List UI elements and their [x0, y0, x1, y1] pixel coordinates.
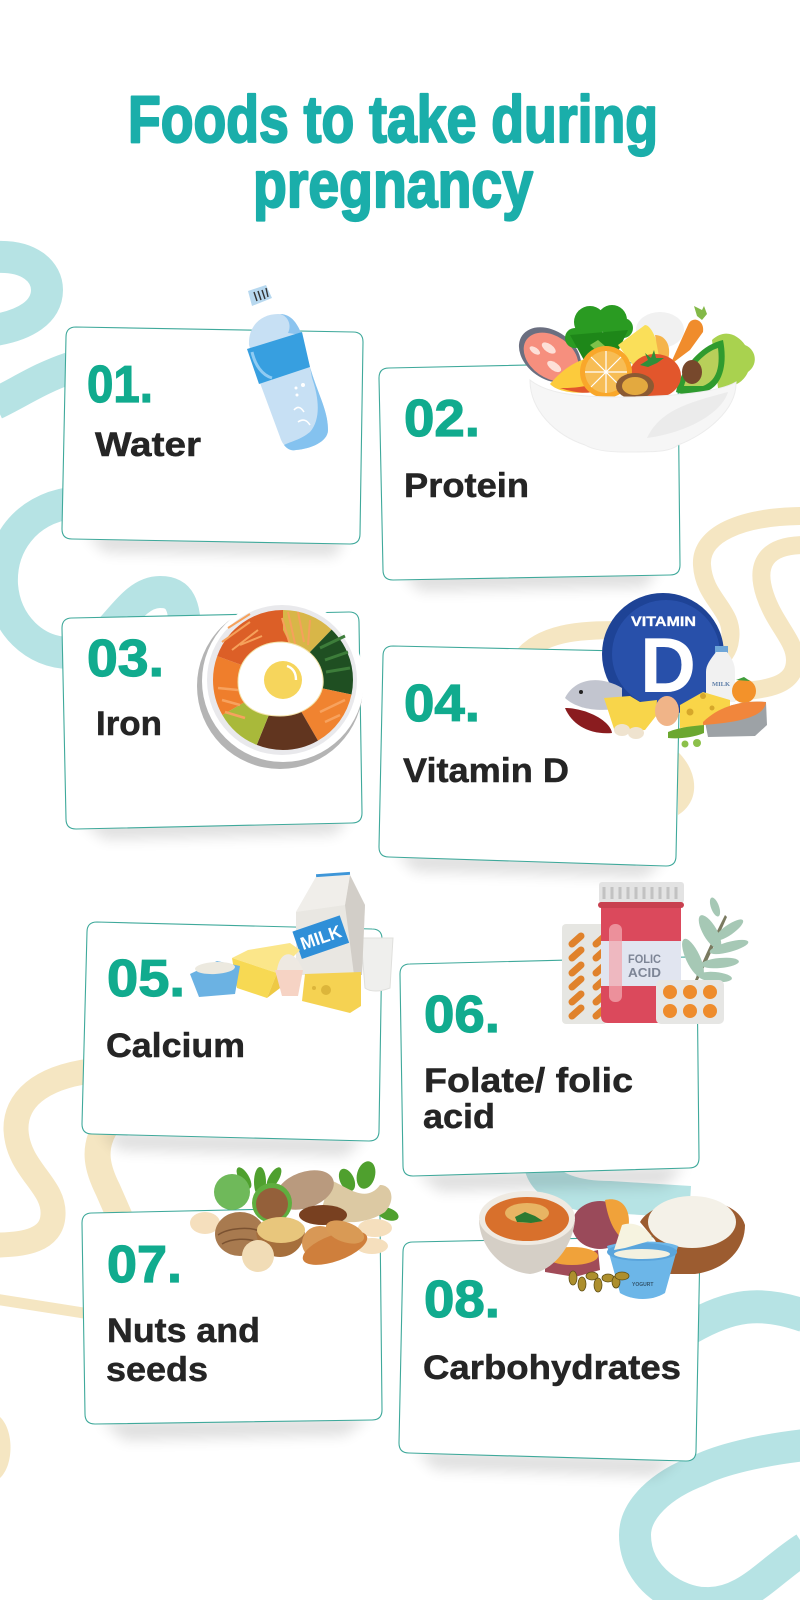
ingredient wedges — [233, 630, 333, 730]
salmon — [508, 316, 592, 394]
carrot — [670, 320, 703, 365]
peas — [668, 725, 704, 738]
right blister — [656, 980, 724, 1024]
glass — [361, 938, 393, 991]
panel: 02 protein: Protein — [404, 467, 529, 505]
salmon steak — [705, 702, 767, 737]
panel: 03 iron: Iron — [96, 705, 162, 743]
bowl — [530, 380, 736, 452]
panel: 04 vitamin d — [379, 646, 680, 877]
panel: 08 carbohydrates: 08. — [424, 1271, 500, 1329]
cheese wedge — [302, 972, 361, 1013]
pecan — [271, 1163, 339, 1217]
panel: 07 nuts — [82, 1207, 382, 1440]
icon: folic acid bottle — [562, 882, 750, 1024]
orange — [732, 679, 756, 703]
panel: 07 nuts: Nuts and — [107, 1312, 260, 1350]
yogurt cup — [607, 1242, 678, 1299]
panel: 01 water — [62, 327, 363, 556]
panel: 07 nuts: 07. — [107, 1236, 182, 1294]
icon: food bowl — [508, 305, 755, 452]
ice cream — [275, 970, 303, 996]
milk bottle — [715, 646, 728, 653]
panel: 06 folate — [400, 957, 699, 1191]
icon: nuts group — [190, 1159, 400, 1272]
icon: dairy group — [190, 872, 393, 1013]
bottle — [599, 882, 684, 903]
panel: 08 carbohydrates: Carbohydrates — [423, 1349, 681, 1387]
butter — [232, 943, 300, 973]
mushrooms — [614, 724, 630, 736]
leaves — [678, 896, 750, 983]
icon: vitamin D group: MILK — [712, 681, 730, 688]
tomato — [629, 354, 681, 398]
icon: vitamin D group: D — [640, 621, 696, 709]
panel: 04 vitamin d: 04. — [404, 675, 480, 733]
walnut — [616, 373, 654, 399]
panel: 06 folate: 06. — [424, 986, 500, 1044]
rice bowl — [640, 1200, 745, 1274]
title: pregnancy — [253, 147, 533, 221]
apple — [550, 358, 592, 393]
sweet potato — [572, 1201, 628, 1249]
icon: vitamin D group — [565, 593, 767, 748]
panel: 02 protein: 02. — [404, 390, 480, 448]
soup bowl — [479, 1220, 575, 1274]
yogurt — [190, 961, 240, 997]
lettuce — [712, 334, 755, 388]
broccoli — [565, 305, 633, 362]
panel: 03 iron: 03. — [87, 630, 164, 688]
avocado — [676, 340, 725, 395]
butter — [604, 696, 657, 732]
icon: folic acid bottle: ACID — [628, 965, 661, 980]
bottle label: FOLIC — [628, 952, 661, 966]
icon: water bottle — [247, 285, 328, 450]
panel: 01 water: 01. — [87, 356, 153, 414]
panel: 02 protein — [379, 362, 680, 591]
title — [128, 82, 658, 221]
panel: 06 folate: Folate/ folic — [424, 1062, 633, 1100]
cheese — [618, 325, 660, 368]
fish — [565, 680, 622, 710]
cheese — [680, 692, 730, 728]
milk carton — [296, 875, 365, 975]
milk label: MILK — [298, 921, 344, 954]
icon: carbohydrates group — [479, 1191, 745, 1299]
pecan half — [299, 1205, 347, 1225]
milk label — [292, 915, 349, 959]
egg — [655, 696, 679, 726]
seeds — [569, 1271, 629, 1292]
seeds — [190, 1212, 220, 1234]
panel: 07 nuts: seeds — [106, 1351, 208, 1389]
yogurt label: YOGURT — [632, 1282, 653, 1288]
macadamia — [242, 1240, 274, 1272]
left blister — [562, 924, 607, 1024]
panel: 06 folate: acid — [423, 1098, 495, 1136]
liver — [565, 708, 612, 733]
panel: 05 calcium — [82, 922, 382, 1156]
panel: 08 carbohydrates — [399, 1236, 700, 1476]
icon: bibimbap plate — [197, 600, 364, 769]
panel: 05 calcium: 05. — [107, 950, 185, 1008]
walnut half — [256, 1232, 305, 1257]
orange — [580, 346, 632, 398]
panel: 04 vitamin d: Vitamin D — [403, 752, 569, 790]
title: Foods to take during — [128, 82, 658, 156]
green fruit — [214, 1174, 250, 1210]
almonds — [302, 1226, 338, 1260]
panel: 01 water: Water — [95, 426, 201, 464]
icon: vitamin D group: VITAMIN — [631, 613, 696, 629]
walnut — [215, 1212, 265, 1256]
panel: 03 iron — [62, 612, 362, 839]
panel: 05 calcium: Calcium — [106, 1027, 245, 1065]
cashew — [320, 1180, 391, 1222]
leaves — [234, 1159, 400, 1223]
